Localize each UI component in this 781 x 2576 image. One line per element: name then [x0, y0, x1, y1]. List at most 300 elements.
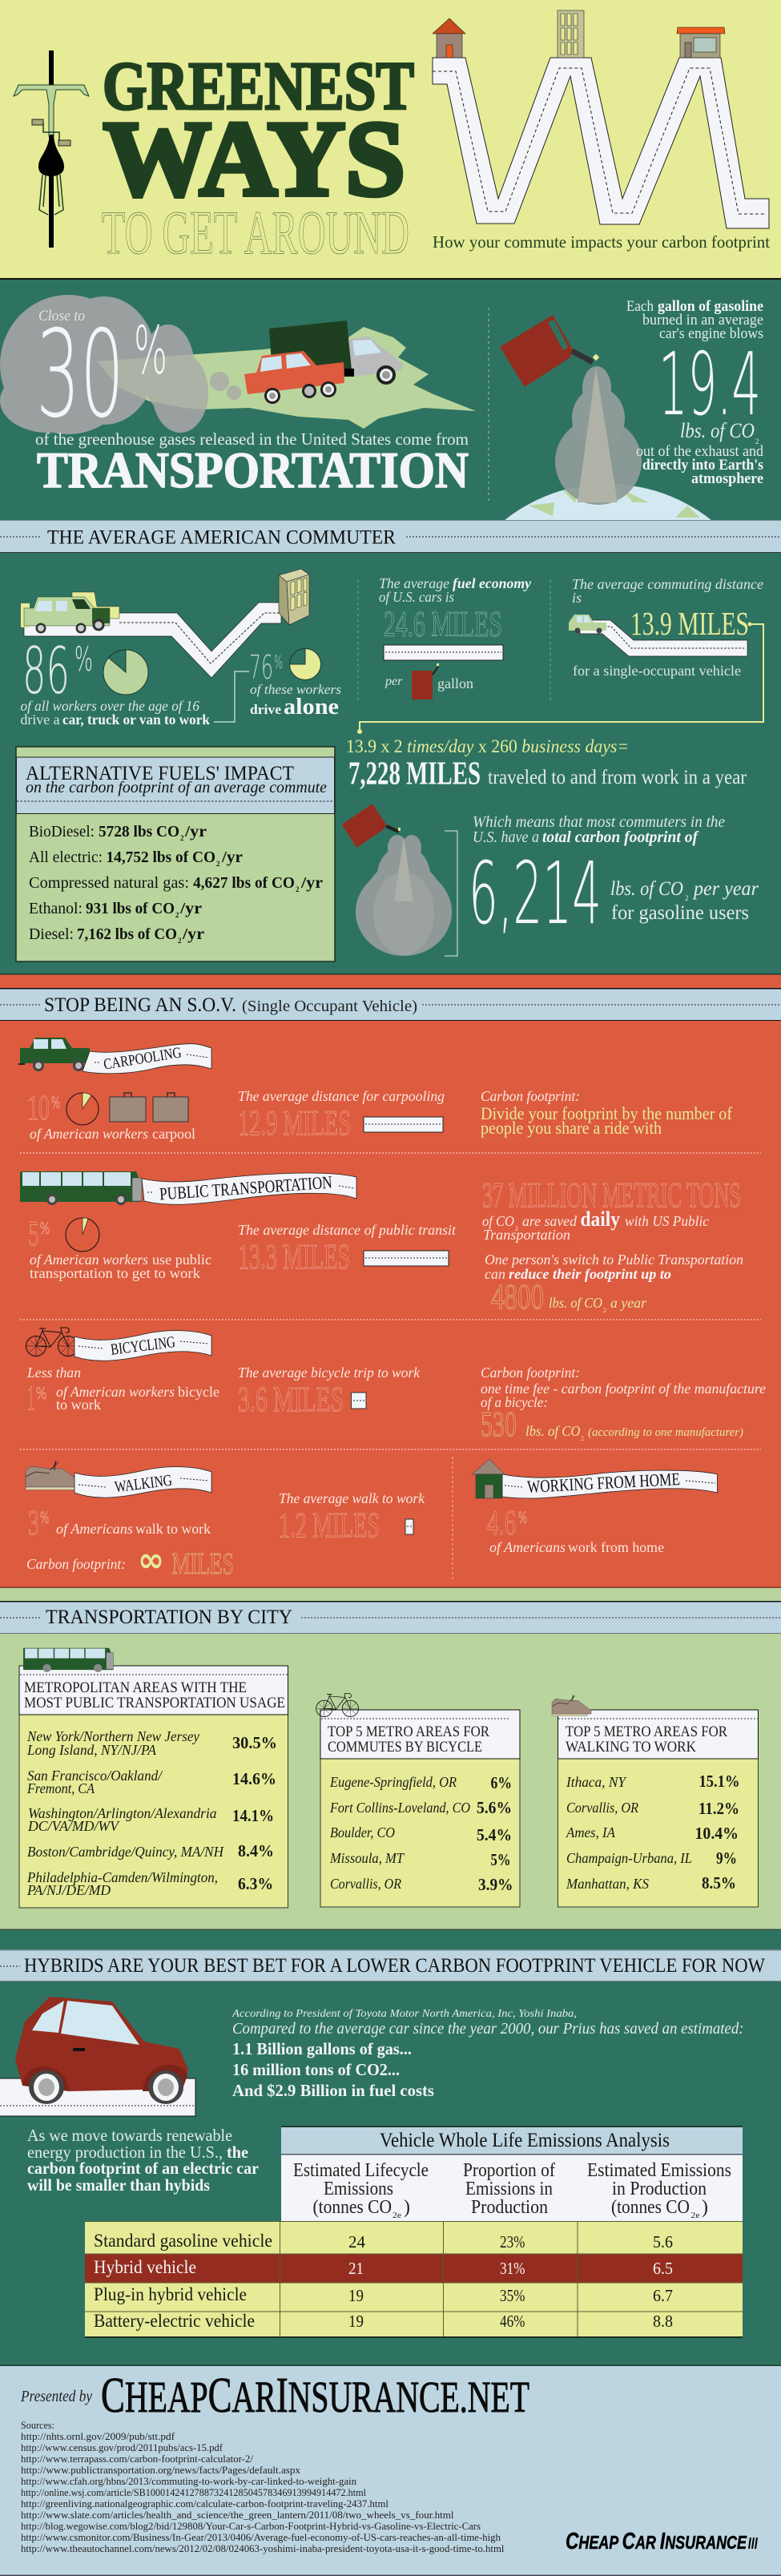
panel: alternative fuels impact: on the carbon footprint of an average commute	[26, 779, 327, 796]
stat: walking share: ∞	[138, 1540, 164, 1579]
stat: commuting distance: The average commuting distance	[572, 576, 763, 592]
icon: bus	[20, 1171, 142, 1205]
text: table rows: 14.1%	[232, 1806, 274, 1825]
stat: 30 percent	[35, 305, 469, 498]
text: table rows: 8.5%	[702, 1873, 736, 1893]
text: compressed natural gas: /yr	[300, 874, 323, 892]
stat: bicycling share: Less than	[26, 1365, 81, 1381]
text: toyota quote: According to President of Toyota Motor North America, Inc, Yoshi Inaba,	[231, 2008, 577, 2020]
text: table rows: 6.3%	[238, 1874, 273, 1893]
text: gallon of gasoline: atmosphere	[691, 470, 763, 487]
text: column headers: )	[404, 2197, 410, 2218]
icon: gasoline smoke	[555, 366, 642, 505]
icon: green car	[18, 1038, 90, 1071]
stat: home share: 4.6	[487, 1503, 516, 1542]
text: ethanol: Ethanol:	[29, 900, 83, 917]
table rows: 19	[348, 2312, 364, 2331]
stat: public transit distance: The average distance of public transit	[238, 1222, 457, 1238]
text: column headers: (tonnes CO	[611, 2197, 690, 2218]
text: table rows: 10.4%	[695, 1824, 739, 1843]
text: column headers: 2e	[690, 2211, 700, 2220]
icon: small shoes	[552, 1695, 591, 1716]
stat: 37 million metric tons: of CO	[482, 1213, 514, 1229]
stat: 76 percent: 76	[249, 648, 273, 687]
banner: bicycling	[74, 1331, 211, 1361]
text: biodiesel: 5728 lbs CO	[99, 823, 179, 841]
stat: walking share: walk to work	[135, 1521, 211, 1537]
stat: 30 percent: %	[134, 313, 167, 389]
stat: 86 percent: of all workers over the age of 16	[21, 698, 199, 714]
heading: transportation by city	[0, 1601, 781, 1635]
text: biodiesel: BioDiesel:	[29, 823, 95, 841]
stat: walking share	[26, 1503, 234, 1581]
text: table rows: Washington/Arlington/Alexandria	[28, 1805, 216, 1821]
stat: public transit share: %	[40, 1218, 50, 1238]
icon: road	[0, 2078, 195, 2116]
text: sources: http://blog.wegowise.com/blog2/bid/129808/Your-Car-s-Carbon-Footprint-Hybrid-vs-Gasoline-vs-Electric-Cars	[21, 2520, 481, 2532]
text: renewable energy note: the	[227, 2143, 248, 2162]
stat: public transit share: use public	[152, 1252, 211, 1268]
stat: bicycling share	[26, 1365, 219, 1417]
stat: carpool share: 10	[27, 1088, 50, 1127]
icon: home	[472, 1459, 505, 1498]
table rows: 31%	[500, 2259, 525, 2278]
text: bicycle footprint: (according to one manufacturer)	[588, 1426, 743, 1439]
stat: total carbon footprint: 6,214	[469, 845, 602, 944]
text: table rows: Champaign-Urbana, IL	[566, 1850, 692, 1866]
text: diesel: 2	[178, 937, 182, 945]
text: column headers: )	[702, 2197, 708, 2218]
stat: 30 percent: of the greenhouse gases released in the United States come from	[35, 429, 469, 449]
text: table rows: Corvallis, OR	[330, 1876, 401, 1892]
text: biodiesel	[29, 823, 207, 842]
text: toyota quote: Compared to the average car since the year 2000, our Prius has saved an estimated:	[232, 2020, 743, 2038]
stat: 37 million metric tons: with US Public	[625, 1213, 709, 1229]
panel: stop being an sov	[0, 1021, 781, 1587]
text: diesel: /yr	[182, 925, 204, 943]
text: table rows: New York/Northern New Jersey	[26, 1728, 199, 1744]
panel: average commuter	[0, 553, 781, 974]
stat: 37 million metric tons: daily	[580, 1207, 620, 1231]
stat: 30 percent: Close to	[38, 308, 85, 325]
text: gallon of gasoline: car's engine blows	[659, 325, 763, 342]
text: table rows: 11.2%	[698, 1799, 739, 1818]
banner: walking: WALKING	[114, 1472, 173, 1496]
text: diesel	[29, 925, 204, 945]
text: toyota quote: And $2.9 Billion in fuel costs	[232, 2081, 434, 2100]
text: toyota quote: 16 million tons of CO2...	[232, 2060, 400, 2079]
text: gallon of gasoline: Each	[626, 298, 654, 315]
text: column headers: Proportion of	[463, 2160, 555, 2181]
text: carpool footprint: Carbon footprint:	[481, 1088, 580, 1104]
text: table rows: Eugene-Springfield, OR	[329, 1774, 457, 1790]
title: TO GET AROUND	[102, 198, 409, 267]
icon: office building	[558, 10, 584, 58]
icon: exhaust cloud	[0, 295, 264, 434]
icon: shop	[677, 27, 725, 58]
text: table rows: 5.4%	[477, 1825, 512, 1844]
text: presented by: Presented by	[20, 2388, 92, 2405]
text: diesel: Diesel:	[29, 925, 74, 943]
stat: 86 percent	[21, 634, 210, 728]
stat: walking share: 3	[28, 1503, 39, 1542]
text: column headers: Production	[471, 2197, 548, 2218]
stat: commuting distance	[569, 576, 763, 679]
text: column headers	[293, 2160, 731, 2220]
text: table rows: 15.1%	[698, 1772, 740, 1791]
text: table rows: 6%	[490, 1773, 512, 1792]
stat: bicycling share: %	[36, 1383, 46, 1403]
text: column headers: (tonnes CO	[312, 2197, 392, 2218]
text: table rows: 30.5%	[232, 1733, 277, 1752]
text: bicycle footprint: of a bicycle:	[481, 1394, 548, 1410]
icon: delivery truck	[269, 320, 404, 385]
stat: public transit distance	[238, 1222, 457, 1276]
text: annual mileage	[346, 736, 747, 792]
stat: 37 million metric tons: can	[485, 1266, 505, 1282]
heading: hybrids	[0, 1949, 781, 1982]
table rows: 24	[348, 2232, 365, 2251]
panel: footer	[0, 2365, 781, 2576]
banner: working from home: WORKING FROM HOME	[526, 1469, 680, 1497]
panel: public transportation usage table: METROPOLITAN AREAS WITH THE	[24, 1679, 247, 1696]
text: ethanol	[29, 900, 202, 919]
panel: walking to work table: WALKING TO WORK	[566, 1739, 696, 1756]
stat: walking share: Carbon footprint:	[26, 1556, 126, 1572]
stat: fuel economy: 24.6 MILES	[384, 604, 502, 644]
stat: carpool distance: The average distance for carpooling	[238, 1088, 445, 1104]
stat: 86 percent: car, truck or van to work	[62, 712, 210, 728]
text: compressed natural gas: Compressed natural gas:	[29, 874, 189, 892]
icon: shoes	[26, 1461, 81, 1490]
text: compressed natural gas: 2	[296, 885, 300, 893]
text: table rows: 8.4%	[238, 1841, 274, 1860]
stat: 76 percent	[249, 648, 341, 720]
text: renewable energy note	[27, 2126, 259, 2195]
icon: globe	[505, 484, 711, 520]
text: carpool footprint	[481, 1088, 733, 1138]
stat: 76 percent: alone	[284, 695, 339, 720]
table rows: 35%	[500, 2286, 525, 2305]
text: sources: http://online.wsj.com/article/SB10001424127887324128504578346913994914472.html	[21, 2486, 366, 2498]
text: annual mileage: 7,228 MILES	[348, 755, 481, 792]
icon: hybrid car	[15, 1997, 188, 2104]
stat: bicycling share: of American workers	[56, 1384, 175, 1400]
panel: bicycle commutes table: COMMUTES BY BICYCLE	[328, 1739, 482, 1756]
text: gallon of gasoline: directly into Earth's	[642, 457, 763, 474]
text: all electric	[29, 849, 243, 868]
text: table rows: Missoula, MT	[329, 1850, 405, 1866]
stat: public transit share: transportation to get to work	[30, 1265, 200, 1281]
stat: fuel economy: The average	[379, 575, 449, 591]
text: table rows: 3.9%	[478, 1875, 513, 1894]
stat: total carbon footprint: per year	[692, 878, 759, 900]
text: table rows: 5%	[490, 1850, 511, 1869]
stat: bicycle trip distance: The average bicycle trip to work	[238, 1365, 421, 1381]
stat: total carbon footprint: total carbon footprint of	[542, 828, 699, 846]
text: toyota quote: 1.1 Billion gallons of gas...	[232, 2039, 412, 2058]
stat: 37 million metric tons: reduce their footprint up to	[509, 1266, 671, 1282]
stat: fuel economy: per	[384, 675, 403, 688]
icon: house	[433, 18, 465, 58]
table rows	[85, 2221, 743, 2338]
text: bicycle footprint: lbs. of CO	[525, 1423, 580, 1439]
text: table rows	[566, 1772, 740, 1893]
stat: 30 percent: TRANSPORTATION	[37, 442, 469, 498]
title: GREENEST	[103, 47, 414, 124]
stat: carpool share: of American workers	[30, 1126, 148, 1142]
stat: walking share: of Americans	[56, 1521, 133, 1537]
text: ethanol: /yr	[179, 900, 202, 917]
text: ethanol: 931 lbs of CO	[86, 900, 175, 917]
text: table rows: 9%	[716, 1848, 737, 1868]
stat: carpool share: carpool	[152, 1126, 195, 1142]
text: column headers: in Production	[612, 2179, 707, 2199]
text: sources: http://www.cfah.org/hbns/2013/commuting-to-work-by-car-linked-to-weight-gain	[21, 2475, 356, 2487]
text: table rows: Ithaca, NY	[566, 1774, 627, 1790]
stat: fuel economy: of U.S. cars is	[379, 589, 454, 605]
stat: fuel economy: gallon	[437, 675, 473, 691]
panel: hybrids	[0, 1981, 781, 2365]
heading: stop being an sov	[0, 988, 781, 1021]
text: sources: http://www.csmonitor.com/Business/In-Gear/2013/0406/Average-fuel-economy-of-US-cars-reaches-an-all-time-high	[21, 2531, 501, 2543]
table rows: Hybrid vehicle	[94, 2257, 196, 2277]
text: table rows: Long Island, NY/NJ/PA	[26, 1742, 157, 1758]
stat: fuel economy	[379, 575, 532, 699]
table: vehicle whole life emissions	[85, 2126, 743, 2338]
text: all electric: 2	[216, 860, 220, 868]
text: gallon of gasoline: out of the exhaust and	[636, 443, 763, 460]
text: table rows: PA/NJ/DE/MD	[26, 1882, 111, 1898]
stat: home share: work from home	[568, 1539, 664, 1555]
text: table rows	[26, 1728, 277, 1898]
text: diesel: 7,162 lbs of CO	[77, 925, 177, 943]
text: table rows: 5.6%	[477, 1798, 512, 1817]
text: carpool footprint: Divide your footprint by the number of	[481, 1103, 733, 1123]
icon: red car	[244, 351, 344, 404]
heading: stop being an sov: (Single Occupant Vehicle)	[242, 998, 417, 1015]
icon: W shaped road	[433, 58, 769, 228]
icon: gas can	[500, 315, 599, 387]
text: gallon of gasoline	[626, 298, 763, 487]
stat: bicycle trip distance	[238, 1365, 421, 1419]
stat: 37 million metric tons: 2	[515, 1225, 518, 1232]
stat: walk distance	[279, 1490, 425, 1545]
text: gallon of gasoline: lbs. of CO	[680, 419, 755, 442]
text: table rows: Boston/Cambridge/Quincy, MA/NH	[27, 1844, 224, 1860]
text: column headers: Estimated Emissions	[587, 2160, 731, 2181]
panel: header	[0, 0, 781, 280]
text: bicycle footprint: 2	[581, 1435, 584, 1442]
text: renewable energy note: energy production in the U.S.,	[27, 2143, 223, 2162]
text: table rows: Philadelphia-Camden/Wilmington,	[26, 1869, 218, 1885]
icon: office block	[279, 569, 309, 625]
stat: 37 million metric tons: are saved	[522, 1213, 578, 1229]
icon: road to office	[24, 603, 281, 678]
text: bicycle footprint: Carbon footprint:	[481, 1365, 580, 1381]
subtitle: How your commute impacts your carbon footprint	[433, 232, 770, 252]
stat: 37 million metric tons: Transportation	[483, 1227, 570, 1243]
text: all electric: 14,752 lbs of CO	[106, 849, 215, 866]
stat: 37 million metric tons: lbs. of CO	[549, 1295, 602, 1311]
text: sources	[21, 2419, 505, 2554]
stat: bicycle trip distance: 3.6 MILES	[238, 1380, 344, 1419]
text: table rows: 14.6%	[232, 1769, 276, 1788]
panel: bicycle commutes table	[316, 1694, 520, 1907]
stat: bicycling share: 1	[27, 1378, 35, 1417]
stat: commuting distance: is	[572, 590, 582, 606]
text: column headers: 2e	[393, 2211, 402, 2220]
text: sources: Sources:	[21, 2419, 54, 2431]
stat: 37 million metric tons: 4800	[491, 1277, 544, 1316]
heading: the average american commuter: THE AVERAGE AMERICAN COMMUTER	[47, 527, 396, 548]
stat: 76 percent: drive	[250, 702, 281, 717]
icon: small bus	[23, 1648, 113, 1672]
stat: carpool distance	[238, 1088, 445, 1143]
text: table rows: DC/VA/MD/WV	[27, 1818, 120, 1834]
arrow: yellow connector	[357, 622, 763, 734]
text: table rows: Ames, IA	[566, 1824, 616, 1840]
stat: walk distance: The average walk to work	[279, 1490, 425, 1506]
panel: public transportation usage table: MOST PUBLIC TRANSPORTATION USAGE	[24, 1695, 285, 1711]
stat: total carbon footprint: lbs. of CO	[610, 878, 683, 900]
stat: bicycling share: to work	[56, 1397, 101, 1413]
banner: public transportation: PUBLIC TRANSPORTATION	[159, 1171, 333, 1204]
stat: 86 percent: drive a	[21, 712, 59, 728]
text: annual mileage: traveled to and from work in a year	[488, 767, 747, 788]
text: column headers: Emissions	[324, 2179, 393, 2199]
stat: 76 percent: of these workers	[250, 682, 341, 697]
text: bicycle footprint: one time fee - carbon footprint of the manufacture	[481, 1381, 766, 1397]
table rows: Plug-in hybrid vehicle	[94, 2284, 247, 2304]
stat: total carbon footprint: for gasoline users	[611, 902, 749, 924]
panel: transportation by city	[0, 1634, 781, 1929]
stat: carpool share: %	[51, 1092, 60, 1112]
text: table rows: Manhattan, KS	[566, 1876, 649, 1892]
text: bicycle footprint: 530	[481, 1405, 517, 1444]
table: vehicle whole life emissions: Vehicle Whole Life Emissions Analysis	[380, 2130, 670, 2151]
text: gallon of gasoline: 2	[755, 437, 759, 445]
text: biodiesel: 2	[180, 834, 184, 842]
stat: home share	[487, 1503, 664, 1555]
icon: commuter vehicles	[21, 592, 119, 633]
stat: fuel economy: fuel economy	[453, 575, 532, 591]
text: gallon of gasoline: burned in an average	[642, 312, 763, 329]
text: sources: http://www.theautochannel.com/news/2012/02/08/024063-yoshimi-inaba-president-toyota-usa-it-s-good-time-to.html	[21, 2542, 505, 2554]
table rows: 19	[348, 2286, 364, 2305]
text: annual mileage: 13.9 x 2 times/day x 260 business days=	[346, 736, 629, 756]
table rows: 23%	[500, 2232, 525, 2251]
text: sources: http://greenliving.nationalgeographic.com/calculate-carbon-footprint-traveling-2437.html	[21, 2497, 388, 2509]
text: compressed natural gas	[29, 874, 323, 893]
stat: 86 percent: 86	[22, 634, 70, 708]
heading: transportation by city: TRANSPORTATION BY CITY	[46, 1606, 292, 1628]
table rows: Standard gasoline vehicle	[94, 2231, 272, 2251]
stat: home share: %	[518, 1507, 527, 1527]
text: all electric: /yr	[221, 849, 243, 866]
icon: bicycle	[26, 1328, 79, 1356]
banner: bicycling: BICYCLING	[110, 1333, 176, 1359]
stat: public transit share: 5	[28, 1214, 39, 1253]
text: carpool footprint: people you share a ride with	[481, 1118, 662, 1138]
stat: 37 million metric tons: a year	[610, 1295, 647, 1311]
title: sponsor name: CHEAPCARINSURANCE.NET	[101, 2368, 529, 2423]
text: column headers: Estimated Lifecycle	[293, 2160, 429, 2181]
text: toyota quote	[231, 2008, 744, 2100]
text: all electric: All electric:	[29, 849, 103, 866]
text: sources: http://www.terrapass.com/carbon-footprint-calculator-2/	[21, 2453, 253, 2465]
table rows: 21	[348, 2259, 364, 2278]
panel: walking to work table: TOP 5 METRO AREAS FOR	[566, 1723, 727, 1740]
text: table rows: San Francisco/Oakland/	[27, 1768, 163, 1784]
text: table rows: Fort Collins-Loveland, CO	[329, 1800, 470, 1816]
text: sources: http://www.slate.com/articles/health_and_science/the_green_lantern/2011/08/two_wheels_vs_four.html	[21, 2509, 454, 2521]
panel: alternative fuels impact: ALTERNATIVE FUELS' IMPACT	[26, 763, 294, 784]
table rows: Battery-electric vehicle	[94, 2311, 255, 2331]
text: renewable energy note: will be smaller than hybids	[27, 2175, 210, 2195]
stat: 37 million metric tons	[482, 1175, 743, 1316]
banner: carpooling: CARPOOLING	[103, 1044, 183, 1074]
icon: bicycle top view	[14, 50, 89, 248]
stat: total carbon footprint: 2	[685, 894, 689, 902]
stat: total carbon footprint: U.S. have a	[473, 828, 539, 846]
table rows: 5.6	[653, 2232, 673, 2251]
heading: stop being an sov: STOP BEING AN S.O.V.	[44, 994, 236, 1016]
table rows: 6.5	[653, 2259, 673, 2278]
stat: public transit distance: 13.3 MILES	[238, 1237, 350, 1276]
stat: carpool share	[27, 1088, 195, 1142]
panel: transportation share	[0, 295, 763, 520]
icon: map of the United States	[97, 327, 476, 429]
text: table rows: Boulder, CO	[330, 1824, 395, 1840]
stat: 30 percent: 30	[36, 305, 124, 445]
text: sources: http://www.publictransportation.org/news/facts/Pages/default.aspx	[21, 2464, 300, 2476]
table rows: 8.8	[653, 2312, 673, 2331]
panel: walking to work table	[552, 1695, 758, 1907]
table rows: 46%	[500, 2312, 525, 2331]
stat: 86 percent: %	[74, 639, 93, 679]
stat: 76 percent: %	[274, 653, 283, 673]
text: sources: http://www.census.gov/prod/2011pubs/acs-15.pdf	[21, 2441, 223, 2453]
panel: bicycle commutes table: TOP 5 METRO AREAS FOR	[328, 1723, 489, 1740]
text: biodiesel: /yr	[184, 823, 207, 841]
stat: commuting distance: for a single-occupant vehicle	[573, 663, 741, 679]
text: table rows	[329, 1773, 513, 1894]
text: renewable energy note: carbon footprint of an electric car	[27, 2159, 259, 2178]
stat: walking share: %	[40, 1507, 49, 1527]
text: table rows: Fremont, CA	[26, 1780, 95, 1796]
icon: gas can and smoke	[342, 804, 452, 956]
logo: cheap car insurance: CHEAP CAR INSURANCE	[566, 2529, 747, 2554]
stat: bicycling share: bicycle	[178, 1384, 219, 1400]
stat: walk distance: 1.2 MILES	[279, 1506, 380, 1545]
stat: public transit share: of American workers	[30, 1252, 148, 1268]
stat: 37 million metric tons: One person's switch to Public Transportation	[485, 1252, 743, 1268]
text: sources: http://nhts.ornl.gov/2009/pub/stt.pdf	[21, 2430, 175, 2442]
icon: small bicycle	[316, 1694, 359, 1717]
panel: alternative fuels impact	[16, 747, 335, 961]
stat: total carbon footprint	[469, 813, 759, 944]
stat: 37 million metric tons: 2	[603, 1307, 606, 1314]
table rows: 6.7	[653, 2286, 673, 2305]
text: bicycle footprint	[481, 1365, 766, 1444]
stat: public transit share	[28, 1214, 211, 1281]
stat: total carbon footprint: Which means that most commuters in the	[473, 813, 725, 831]
stat: home share: of Americans	[489, 1539, 566, 1555]
text: compressed natural gas: 4,627 lbs of CO	[193, 874, 295, 892]
text: renewable energy note: As we move towards renewable	[27, 2126, 232, 2145]
banner: walking	[74, 1467, 211, 1498]
